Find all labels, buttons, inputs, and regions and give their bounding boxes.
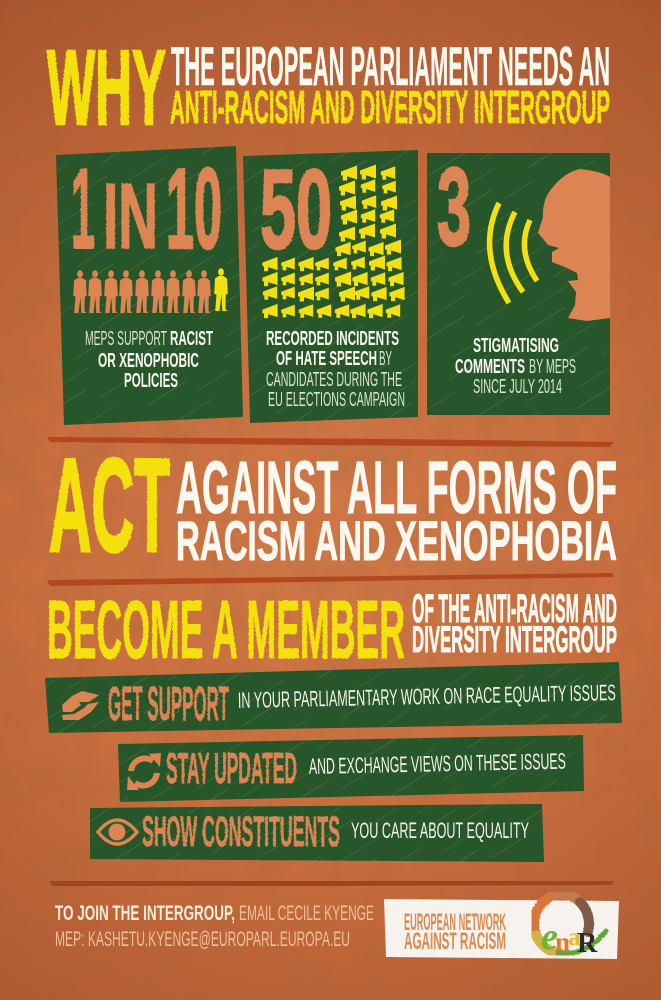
caption: MEPs support racist or xenophobic policies: MEPS SUPPORT xyxy=(85,328,167,350)
icon: refresh arrows xyxy=(127,753,161,790)
panel scratches xyxy=(427,153,610,415)
white box xyxy=(384,899,619,959)
banner background xyxy=(118,735,584,802)
panel: 1 in 10 MEPs xyxy=(56,146,243,425)
banner: stay updated: STAY UPDATED xyxy=(166,744,297,793)
caption: stigmatising comments by MEPs xyxy=(455,335,576,398)
logo: enar lettering: e xyxy=(541,916,558,958)
caption: recorded incidents of hate speech: EU ELECTIONS CAMPAIGN xyxy=(268,389,405,411)
banner: show constituents: SHOW CONSTITUENTS xyxy=(142,808,340,856)
banner scratches xyxy=(90,804,544,862)
logo: ENAR ring xyxy=(534,894,606,954)
call to action: join the intergroup: MEP: KASHETU.KYENGE@EUROPARL.EUROPA.EU xyxy=(55,928,350,951)
banner: stay updated xyxy=(118,735,584,802)
icon: sound waves xyxy=(490,203,537,303)
banner: get support: GET SUPPORT xyxy=(108,678,229,731)
heading: act against racism xyxy=(49,432,617,580)
statistic: 1 in 10: 1 xyxy=(71,146,95,273)
caption: MEPs support racist or xenophobic policies: POLICIES xyxy=(124,370,178,392)
heading: act against racism: ACT xyxy=(49,432,170,580)
panel background xyxy=(56,146,243,425)
statistic: 1 in 10 xyxy=(71,146,222,273)
panel: 3 stigmatising comments xyxy=(427,146,610,415)
statistic: 3: 3 xyxy=(437,146,471,269)
logo box: European Network Against Racism: AGAINST RACISM xyxy=(404,928,506,955)
caption: MEPs support racist or xenophobic policies: OR XENOPHOBIC xyxy=(98,350,199,372)
caption: stigmatising comments by MEPs: SINCE JULY 2014 xyxy=(473,376,562,398)
panel scratches xyxy=(243,150,418,423)
logo: enar lettering: n xyxy=(555,927,570,957)
caption: recorded incidents of hate speech: BY xyxy=(379,348,392,370)
caption: recorded incidents of hate speech: RECORDED INCIDENTS xyxy=(266,328,399,350)
caption: recorded incidents of hate speech xyxy=(266,328,405,411)
caption: recorded incidents of hate speech: OF HATE SPEECH xyxy=(276,348,377,370)
call to action: join the intergroup xyxy=(55,902,374,951)
text: you care about equality: YOU CARE ABOUT EQUALITY xyxy=(351,818,529,843)
logo: enar lettering xyxy=(541,916,598,959)
caption: MEPs support racist or xenophobic policies: RACIST xyxy=(170,328,213,350)
caption: MEPs support racist or xenophobic policies xyxy=(85,328,213,392)
icon: speaking head silhouette xyxy=(538,169,610,321)
panel: 1 in 10 MEPs: 10 xyxy=(166,146,222,273)
heading: why the European Parliament needs: WHY xyxy=(47,29,166,147)
icon: eye xyxy=(98,820,137,844)
panel background xyxy=(243,150,418,423)
caption: stigmatising comments by MEPs: COMMENTS xyxy=(455,356,525,378)
logo box: European Network Against Racism xyxy=(384,894,619,959)
banner scratches xyxy=(45,662,622,733)
statistic: 1 in 10: IN xyxy=(103,164,158,268)
call to action: join the intergroup: EMAIL CECILE KYENGE xyxy=(239,902,374,925)
panel background xyxy=(427,153,610,415)
banner background xyxy=(45,662,622,733)
caption: stigmatising comments by MEPs: STIGMATISING xyxy=(473,335,559,357)
caption: recorded incidents of hate speech: CANDIDATES DURING THE xyxy=(266,369,402,391)
panel: 50 incidents of hate speech xyxy=(243,147,418,423)
caption: stigmatising comments by MEPs: BY MEPS xyxy=(529,356,576,378)
logo: enar lettering: R xyxy=(577,928,598,959)
heading: why the European Parliament needs xyxy=(47,29,610,147)
organisation name xyxy=(404,909,506,955)
call to action: join the intergroup: TO JOIN THE INTERGROUP, xyxy=(55,902,235,925)
icon: grid of megaphones xyxy=(262,164,405,318)
icon: supporting hands xyxy=(62,691,99,720)
panel scratches xyxy=(56,146,243,425)
banner background xyxy=(90,804,544,862)
banner scratches xyxy=(118,735,584,802)
heading: become a member xyxy=(47,583,617,676)
statistic: 50: 50 xyxy=(260,147,332,272)
icon: row of ten people, one highlighted xyxy=(73,268,228,313)
logo: enar lettering: a xyxy=(568,924,581,951)
banner: get support xyxy=(45,662,622,733)
banner: show constituents xyxy=(90,804,544,862)
